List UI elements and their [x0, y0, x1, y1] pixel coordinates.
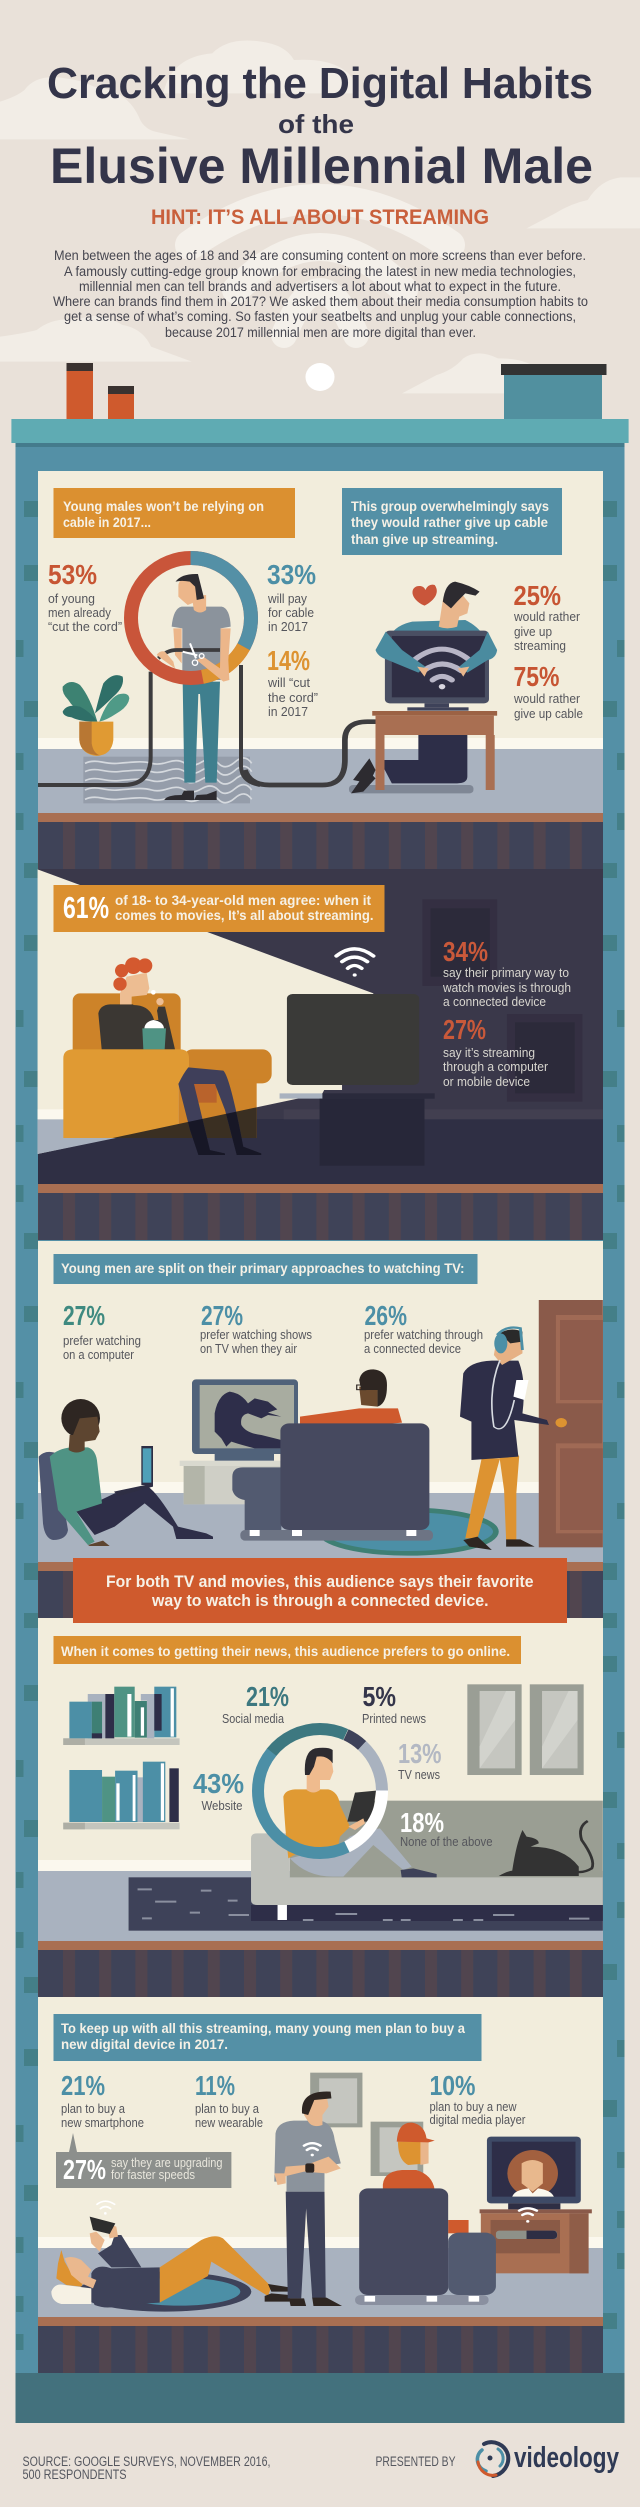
stats: cable: of young: [48, 592, 95, 606]
stats: movies: 34%: [443, 936, 488, 967]
stats: news: 43%: [193, 1768, 244, 1799]
stats: news: [193, 1681, 493, 1849]
illustration: dark room and light beam: [38, 869, 603, 1154]
stats: TV: 27%: [201, 1300, 243, 1331]
logo: videology: [477, 2442, 619, 2476]
panel: TV: [38, 1241, 603, 1618]
stats: cable: in 2017: [268, 620, 308, 634]
stats: cable: will “cut: [267, 676, 311, 690]
illustration: man with headphones: [460, 1327, 567, 1550]
callout: news heading: When it comes to getting their news, this audience prefers to go online.: [61, 1643, 510, 1659]
illustration: man with laptop: [39, 1399, 213, 1546]
stats: news: Website: [202, 1799, 243, 1813]
source note: 500 RESPONDENTS: [22, 2467, 126, 2482]
source note: SOURCE: GOOGLE SURVEYS, NOVEMBER 2016,: [22, 2454, 270, 2469]
presented by: PRESENTED BY: [376, 2454, 456, 2469]
stats: devices: new smartphone: [61, 2116, 144, 2130]
panel: cable: [38, 471, 603, 869]
stats: news: 13%: [398, 1738, 442, 1769]
callout: 61 percent: comes to movies, It’s all about streaming.: [115, 907, 374, 923]
callout: cable heading: Young males won’t be relying on: [63, 498, 264, 514]
stats: cable: for cable: [268, 606, 314, 620]
stats: movies: watch movies is through: [442, 981, 571, 995]
intro paragraph: get a sense of what’s coming. So fasten your seatbelts and unplug your cable connections,: [64, 309, 576, 324]
callout: favourite way to watch: [73, 1558, 567, 1623]
stats: cable: streaming: [514, 639, 566, 653]
callout: cable heading: [54, 488, 295, 538]
stats: cable: 25%: [514, 580, 561, 611]
illustration: standing man with watch: [274, 2092, 342, 2306]
stats: devices: new wearable: [195, 2116, 263, 2130]
stats: devices: plan to buy a new: [430, 2100, 517, 2114]
illustration: door: [320, 1300, 603, 1553]
subtitle: HINT: IT’S ALL ABOUT STREAMING: [151, 206, 489, 229]
callout: favourite way to watch: way to watch is through a connected device.: [151, 1591, 489, 1610]
intro paragraph: Where can brands find them in 2017? We asked them about their media consumption habits to: [53, 294, 588, 309]
panel: movies: [38, 869, 603, 1240]
callout: 27 percent upgrading: [56, 2133, 231, 2188]
title: Elusive Millennial Male: [50, 138, 593, 194]
stats: devices: 10%: [430, 2070, 476, 2101]
illustration: couch and rug: [129, 1801, 603, 1931]
stats: devices: plan to buy a: [61, 2102, 125, 2116]
illustration: lying man with phone: [51, 2201, 290, 2312]
stats: cable: “cut the cord”: [48, 620, 122, 634]
source note: [22, 2454, 270, 2482]
illustration: bookshelves: [63, 1687, 180, 1829]
donut chart: news sources: [258, 1729, 382, 1853]
callout: 27 percent upgrading: 27%: [63, 2154, 106, 2185]
stats: TV: [63, 1300, 483, 1362]
callout: give up cable heading: This group overwhelmingly says: [351, 498, 549, 514]
callout: devices heading: new digital device in 2017.: [61, 2036, 228, 2052]
callout: devices heading: [54, 2014, 482, 2061]
stats: cable: [48, 559, 583, 721]
callout: 27 percent upgrading: say they are upgrading: [111, 2156, 223, 2170]
intro paragraph: millennial men can tell brands and advertisers a lot about what to expect in the future.: [79, 279, 561, 294]
intro paragraph: Men between the ages of 18 and 34 are consuming content on more screens than ever before.: [54, 248, 586, 263]
stats: movies: [442, 936, 571, 1089]
illustration: man in armchair: [63, 957, 272, 1155]
stats: cable: will pay: [267, 592, 308, 606]
stats: movies: 27%: [443, 1014, 486, 1045]
stats: cable: would rather: [513, 692, 580, 706]
stats: TV: prefer watching shows: [200, 1328, 312, 1342]
stats: cable: give up: [514, 625, 552, 639]
stats: TV: on a computer: [63, 1348, 134, 1362]
stats: cable: give up cable: [514, 707, 583, 721]
illustration: man cutting cable: [38, 607, 260, 803]
illustration: cat: [499, 1821, 593, 1876]
callout: devices heading: To keep up with all this streaming, many young men plan to buy a: [61, 2020, 465, 2036]
intro paragraph: [53, 248, 588, 340]
stats: news: Social media: [222, 1712, 284, 1726]
title: of the: [278, 109, 354, 139]
stats: news: None of the above: [400, 1835, 493, 1849]
illustration: TV with dragon and couch: [180, 1379, 433, 1541]
illustration: man with tablet: [283, 1748, 437, 1877]
stats: movies: a connected device: [443, 995, 546, 1009]
stats: TV: 26%: [364, 1300, 407, 1331]
stats: movies: through a computer: [443, 1060, 548, 1074]
stats: TV: prefer watching: [63, 1334, 141, 1348]
stats: cable: in 2017: [268, 705, 308, 719]
stats: devices: plan to buy a: [195, 2102, 259, 2116]
callout: 61 percent: 61%: [63, 890, 109, 925]
stats: movies: say their primary way to: [443, 966, 569, 980]
stats: cable: 75%: [514, 661, 560, 692]
stats: devices: [61, 2070, 526, 2130]
stats: cable: the cord”: [268, 691, 318, 705]
panel: news: [38, 1558, 603, 1997]
callout: give up cable heading: they would rather give up cable: [351, 514, 548, 530]
stats: news: 18%: [400, 1807, 444, 1838]
callout: TV heading: [54, 1254, 478, 1284]
callout: 27 percent upgrading: for faster speeds: [111, 2168, 195, 2182]
callout: news heading: [54, 1636, 521, 1664]
callout: favourite way to watch: For both TV and movies, this audience says their favorite: [106, 1572, 534, 1591]
title: Cracking the Digital Habits: [47, 59, 593, 108]
illustration: man hugging TV: [245, 582, 497, 793]
stats: devices: 21%: [61, 2070, 105, 2101]
callout: cable heading: cable in 2017...: [63, 514, 151, 530]
stats: TV: a connected device: [364, 1342, 461, 1356]
donut chart: cord cutting: [131, 558, 251, 678]
intro paragraph: because 2017 millennial men are more digital than ever.: [165, 325, 476, 340]
clouds: [0, 41, 640, 393]
stats: news: 5%: [362, 1681, 396, 1712]
stats: cable: 33%: [267, 559, 316, 590]
illustration: cable and scissors: [157, 628, 231, 682]
stats: cable: 53%: [48, 559, 97, 590]
building: [11, 419, 629, 2423]
callout: give up cable heading: [342, 488, 562, 555]
illustration: TV and table: [280, 949, 435, 1166]
intro paragraph: A famously cutting-edge group known for embracing the latest in new media technologies,: [64, 264, 576, 279]
stats: cable: men already: [48, 606, 112, 620]
title: [47, 59, 593, 194]
stats: news: 21%: [246, 1681, 289, 1712]
stats: movies: say it’s streaming: [443, 1046, 535, 1060]
stats: movies: or mobile device: [443, 1075, 530, 1089]
stats: news: TV news: [398, 1768, 440, 1782]
stats: devices: 11%: [195, 2070, 235, 2101]
stats: TV: 27%: [63, 1300, 105, 1331]
callout: TV heading: Young men are split on their primary approaches to watching TV:: [61, 1260, 464, 1276]
panel: devices: [38, 1997, 603, 2373]
background wifi symbol: [190, 199, 450, 391]
stats: TV: prefer watching through: [364, 1328, 483, 1342]
callout: give up cable heading: than give up streaming.: [351, 531, 498, 547]
stats: devices: digital media player: [430, 2113, 526, 2127]
stats: news: Printed news: [362, 1712, 426, 1726]
stats: cable: 14%: [267, 645, 310, 676]
illustration: windows: [467, 1684, 584, 1775]
chimneys: [66, 363, 606, 419]
callout: 61 percent: [54, 885, 384, 932]
callout: 61 percent: of 18- to 34-year-old men agree: when it: [115, 892, 371, 908]
stats: cable: would rather: [513, 610, 580, 624]
illustration: device scene: [310, 2073, 592, 2305]
stats: TV: on TV when they air: [200, 1342, 297, 1356]
